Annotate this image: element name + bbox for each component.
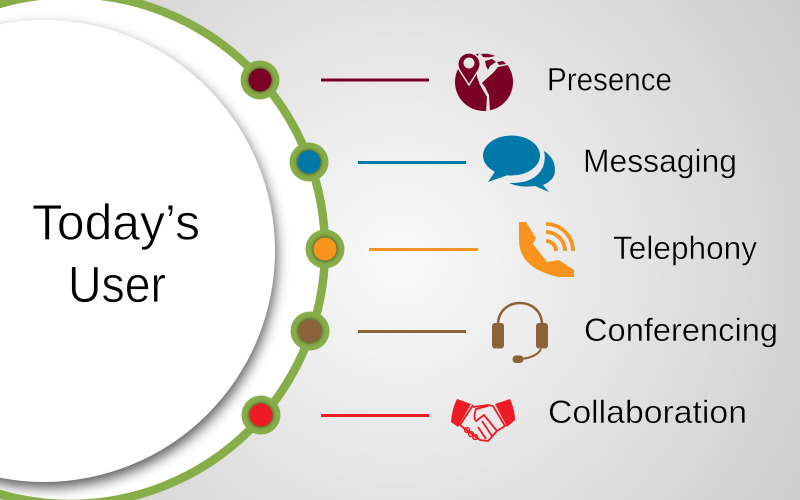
connector: messaging (358, 161, 466, 164)
title: Today’s (32, 194, 200, 250)
label: conferencing: Conferencing (584, 312, 778, 348)
icon: telephone (519, 222, 574, 277)
node: telephony (306, 230, 344, 268)
connector: collaboration (321, 414, 429, 417)
node: messaging (290, 142, 328, 182)
title (32, 194, 200, 313)
icon: chat bubbles (483, 136, 555, 192)
label: presence: Presence (547, 62, 672, 98)
node: presence (240, 60, 280, 100)
label: collaboration: Collaboration (548, 394, 747, 430)
central circle panel (0, 0, 325, 500)
node: conferencing (290, 312, 330, 350)
title: User (68, 256, 166, 313)
node: collaboration (242, 396, 280, 434)
icon: headset (492, 303, 548, 363)
icon: globe with pin (455, 50, 514, 112)
connector: telephony (369, 248, 478, 251)
connector: presence (321, 78, 429, 82)
label: telephony: Telephony (613, 230, 757, 266)
icon: handshake (451, 399, 515, 441)
connector: conferencing (358, 330, 466, 333)
label: messaging: Messaging (583, 143, 737, 179)
